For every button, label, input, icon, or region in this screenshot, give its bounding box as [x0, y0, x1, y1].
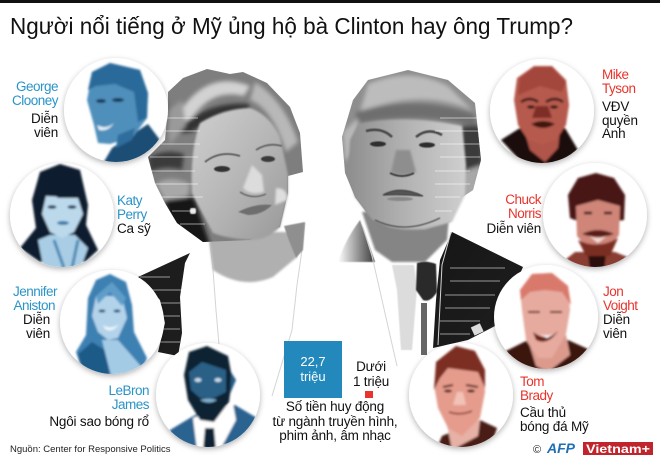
label: George Clooney: [12, 79, 59, 140]
bar: Trump under 1 million: [353, 359, 389, 398]
Clinton facial features: [190, 145, 287, 215]
logos: [533, 440, 653, 456]
Trump shirt: [363, 227, 451, 366]
label: LeBron James: Ngôi sao bóng rổ: [49, 414, 149, 429]
label: Jennifer Aniston: viên: [26, 326, 50, 341]
label: Mike Tyson: quyền: [602, 113, 638, 128]
Clooney circle: [64, 58, 168, 162]
Vietnam+ logo: Vietnam+: [586, 442, 650, 456]
label: Jon Voight: viên: [603, 326, 627, 341]
label: Katy Perry: [117, 193, 151, 236]
portrait: LeBron James: [156, 343, 262, 450]
Tyson circle: [490, 59, 594, 163]
bar: Clinton 22.7 million: [284, 341, 342, 398]
chart caption: từ ngành truyền hình,: [273, 414, 397, 429]
source note: Nguồn: Center for Responsive Politics: [10, 444, 171, 455]
top rule: [0, 0, 660, 3]
label: Katy Perry: Ca sỹ: [117, 221, 151, 236]
label: Mike Tyson: VĐV: [602, 99, 629, 114]
chart: fundraising comparison: [273, 341, 397, 443]
label: Tom Brady: [520, 374, 589, 434]
label: Chuck Norris: Diễn viên: [487, 221, 541, 236]
chart caption: Số tiền huy động: [286, 399, 384, 414]
Trump lapel pin: [471, 323, 484, 336]
Trump tie: [392, 265, 417, 350]
bar: Clinton 22.7 million: triệu: [300, 369, 326, 384]
label: Mike Tyson: Mike: [602, 67, 629, 82]
label: Katy Perry: Katy: [117, 193, 143, 208]
label: Mike Tyson: [602, 67, 638, 141]
chart caption: phim ảnh, âm nhạc: [279, 428, 391, 443]
Trump neck: [362, 205, 450, 262]
AFP logo: AFP: [546, 440, 576, 456]
chart caption: [273, 399, 397, 443]
portrait: Katy Perry: [10, 163, 114, 270]
portrait: Tom Brady: [409, 343, 513, 450]
label: Tom Brady: bóng đá Mỹ: [520, 419, 589, 434]
Clinton collar: [284, 222, 305, 258]
Voight circle: [494, 265, 598, 369]
label: Jon Voight: Diễn: [603, 312, 630, 327]
label: George Clooney: Diễn: [31, 111, 58, 126]
label: Mike Tyson: Tyson: [602, 81, 636, 96]
label: Chuck Norris: Chuck: [505, 192, 542, 207]
Trump facial features: [366, 130, 442, 227]
label: Tom Brady: Cầu thủ: [520, 405, 566, 420]
bar: Clinton 22.7 million: 22,7: [300, 354, 326, 369]
bar: Trump under 1 million: 1 triệu: [353, 374, 389, 389]
label: Katy Perry: Perry: [117, 207, 148, 222]
label: Jennifer Aniston: [13, 284, 58, 341]
Norris circle: [543, 163, 647, 267]
label: LeBron James: LeBron: [108, 383, 149, 398]
label: Mike Tyson: Anh: [602, 126, 625, 141]
portrait: Jon Voight: [494, 265, 598, 372]
portrait: Jennifer Aniston: [60, 270, 164, 380]
Clinton white jacket edge: [210, 223, 305, 396]
James circle: [156, 343, 260, 447]
Trump stripes: [435, 118, 505, 334]
label: Jennifer Aniston: Jennifer: [13, 284, 58, 299]
label: Jon Voight: Voight: [603, 298, 638, 313]
title: Người nổi tiếng ở Mỹ ủng hộ bà Clinton hay ông Trump?: [10, 13, 573, 39]
portrait: Mike Tyson: [490, 59, 594, 166]
label: Jon Voight: [603, 284, 638, 341]
label: George Clooney: George: [16, 79, 58, 94]
Trump microphone: [416, 262, 437, 355]
portrait: Hillary Clinton: [138, 60, 310, 396]
Trump hair: [342, 70, 481, 222]
portrait: Donald Trump: [335, 60, 523, 366]
Clinton neck: [208, 232, 297, 282]
Perry circle: [10, 163, 114, 267]
Trump suit right: [433, 232, 523, 348]
Clinton jacket dark panel: [138, 253, 190, 356]
label: George Clooney: viên: [34, 125, 58, 140]
label: Chuck Norris: [487, 192, 542, 236]
portrait: Chuck Norris: [543, 163, 647, 272]
Aniston circle: [60, 270, 164, 374]
label: Chuck Norris: Norris: [508, 206, 542, 221]
label: George Clooney: Clooney: [12, 93, 59, 108]
label: LeBron James: James: [112, 397, 150, 412]
Clinton face: [192, 108, 288, 240]
bar: Trump under 1 million: Dưới: [356, 359, 386, 374]
portrait: George Clooney: [64, 58, 168, 165]
label: Tom Brady: Tom: [520, 374, 544, 389]
Trump face: [348, 119, 466, 230]
label: LeBron James: [49, 383, 150, 429]
Clinton stripes: [140, 118, 205, 342]
Clinton hair: [148, 69, 303, 242]
label: Tom Brady: Brady: [520, 388, 554, 403]
label: Jennifer Aniston: Aniston: [13, 298, 55, 313]
copyright mark: ©: [533, 444, 541, 456]
Brady circle: [409, 343, 513, 447]
label: Jennifer Aniston: Diễn: [23, 312, 50, 327]
Trump suit left: [338, 220, 375, 262]
label: Jon Voight: Jon: [603, 284, 623, 299]
